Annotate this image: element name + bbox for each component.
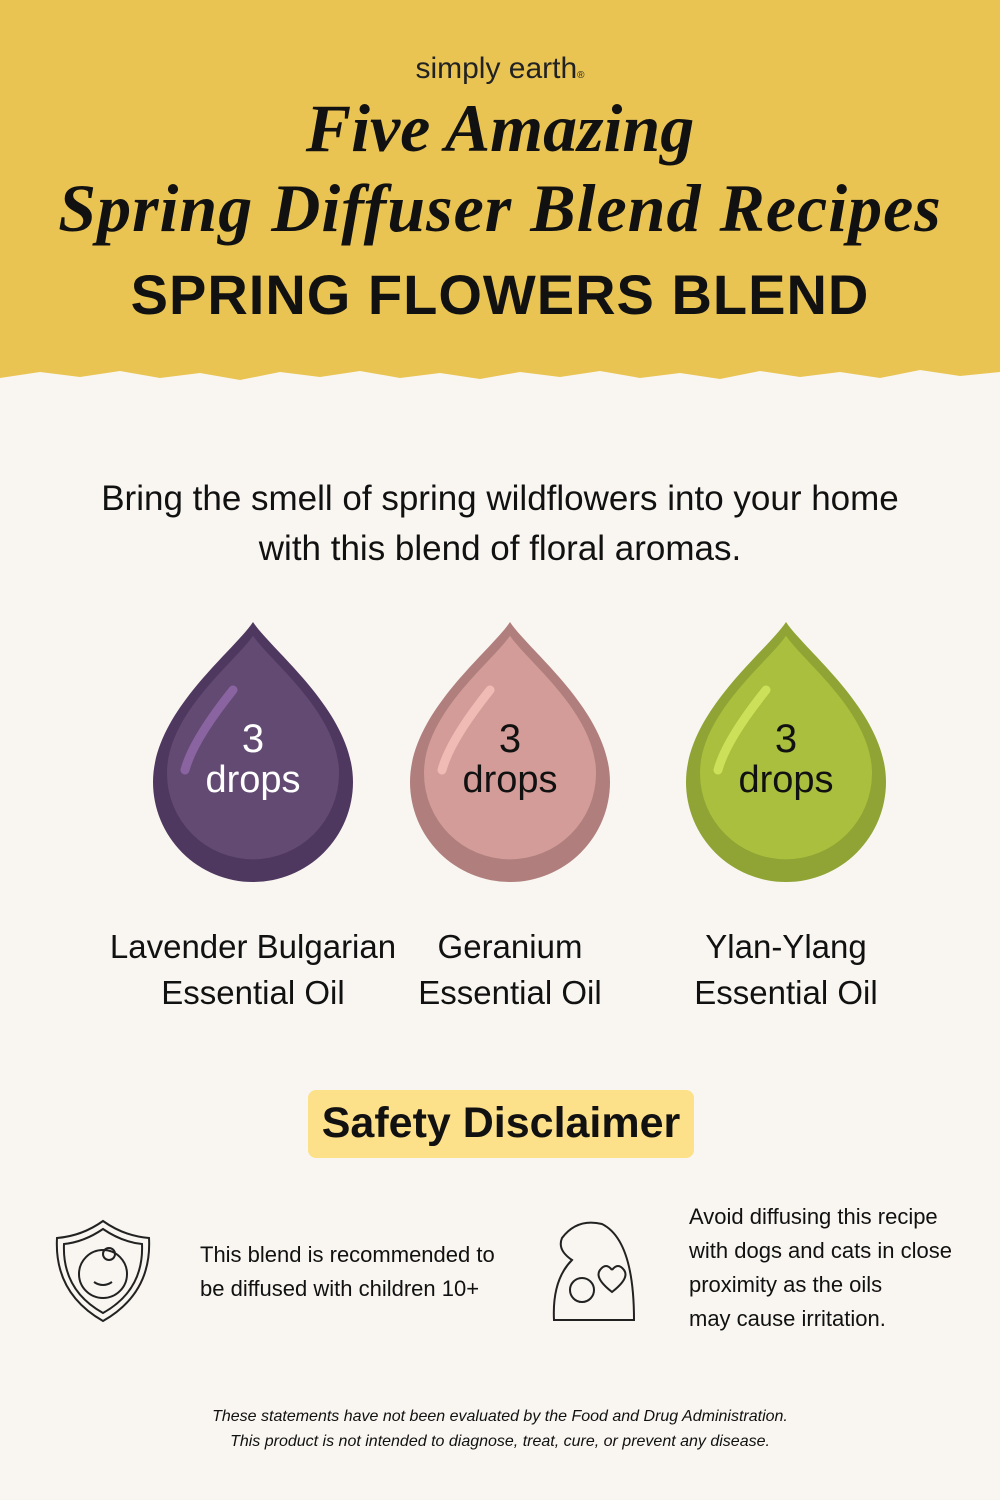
label: lavender: Lavender Bulgarian [110,928,396,965]
icon: child shield [56,1220,150,1322]
subtitle: SPRING FLOWERS BLEND [131,263,869,326]
label: geranium [418,928,602,1011]
pets text [689,1204,952,1331]
label: geranium: Essential Oil [418,974,602,1011]
icon: pets [552,1222,635,1321]
drop: geranium: 3 [499,717,521,761]
drop: ylang: 3 [775,717,797,761]
footer disclaimer: This product is not intended to diagnose, treat, cure, or prevent any disease. [230,1433,770,1450]
label: geranium: Geranium [438,928,582,965]
label: ylang: Essential Oil [694,974,878,1011]
child text: This blend is recommended to [200,1242,495,1267]
pets text: may cause irritation. [689,1306,886,1331]
footer disclaimer: These statements have not been evaluated by the Food and Drug Administration. [212,1408,788,1425]
label: lavender: Essential Oil [161,974,345,1011]
brand logo: simply earth® [415,52,585,85]
drops [153,622,886,882]
drop: lavender: 3 [242,717,264,761]
header band [0,0,1000,380]
drop: geranium: drops [462,759,558,801]
intro text: with this blend of floral aromas. [259,529,741,568]
safety heading: Safety Disclaimer [322,1099,680,1147]
safety heading [308,1090,694,1158]
label: ylang: Ylan-Ylang [705,928,867,965]
drop: ylang [686,622,886,882]
drop: geranium [410,622,610,882]
label: ylang [694,928,878,1011]
intro text: Bring the smell of spring wildflowers into your home [101,479,899,518]
title script: Five Amazing [306,90,694,166]
drop: lavender [153,622,353,882]
pets text: Avoid diffusing this recipe [689,1204,938,1229]
pets text: proximity as the oils [689,1272,882,1297]
title script [58,90,942,246]
child text: be diffused with children 10+ [200,1276,479,1301]
intro text [101,479,899,568]
drop: lavender: drops [205,759,301,801]
label: lavender [110,928,396,1011]
title script: Spring Diffuser Blend Recipes [58,170,942,246]
pets text: with dogs and cats in close [689,1238,952,1263]
footer disclaimer [212,1408,788,1450]
drop: ylang: drops [738,759,834,801]
child text [200,1242,495,1301]
